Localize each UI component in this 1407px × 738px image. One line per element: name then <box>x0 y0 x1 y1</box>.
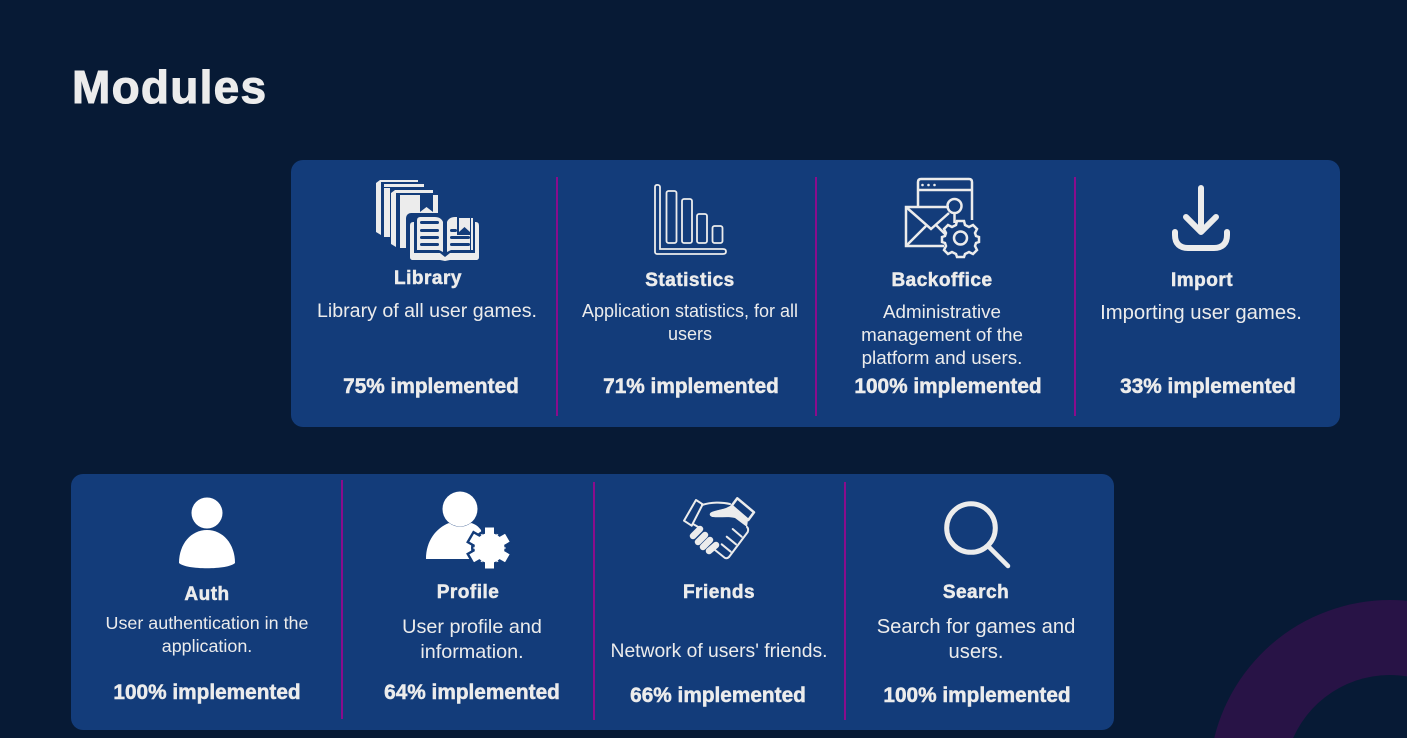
icon: backoffice <box>904 178 980 258</box>
text: import: Importing user games. <box>1100 302 1302 324</box>
heading: search: Search <box>943 582 1009 603</box>
text: friends: Network of users' friends. <box>611 641 827 662</box>
heading: profile: Profile <box>437 582 499 603</box>
heading: backoffice: Backoffice <box>891 270 993 291</box>
text: statistics: Application statistics, for all <box>582 301 798 321</box>
divider <box>593 482 595 720</box>
divider <box>556 177 558 416</box>
text: statistics <box>582 301 798 344</box>
progress: search: 100% implemented <box>883 684 1071 707</box>
icon: library <box>376 180 479 261</box>
text: auth <box>106 613 308 656</box>
heading: auth: Auth <box>184 584 230 605</box>
divider <box>1074 177 1076 416</box>
icon: statistics <box>654 184 727 255</box>
title: Modules <box>72 61 267 113</box>
icon: profile <box>426 492 510 568</box>
icon: search <box>944 501 1010 568</box>
panel: top modules <box>291 160 1340 427</box>
text: auth: User authentication in the <box>106 613 308 633</box>
text: profile <box>402 616 542 663</box>
heading: statistics: Statistics <box>645 270 735 291</box>
text: library: Library of all user games. <box>317 300 537 322</box>
text: backoffice: platform and users. <box>862 347 1022 368</box>
text: profile: information. <box>420 641 524 663</box>
text: backoffice: Administrative <box>883 301 1001 322</box>
heading: import: Import <box>1171 270 1233 291</box>
progress: friends: 66% implemented <box>630 684 806 707</box>
heading: friends: Friends <box>683 582 755 603</box>
progress: backoffice: 100% implemented <box>854 375 1042 398</box>
progress: import: 33% implemented <box>1120 375 1296 398</box>
icon: friends <box>683 497 756 560</box>
text: auth: application. <box>162 636 252 656</box>
progress: profile: 64% implemented <box>384 681 560 704</box>
progress: statistics: 71% implemented <box>603 375 779 398</box>
divider <box>815 177 817 416</box>
divider <box>844 482 846 720</box>
text: statistics: users <box>668 324 712 344</box>
progress: auth: 100% implemented <box>113 681 301 704</box>
text: profile: User profile and <box>402 616 542 638</box>
text: backoffice <box>861 301 1023 368</box>
divider <box>341 480 343 719</box>
text: backoffice: management of the <box>861 324 1023 345</box>
text: search: users. <box>948 641 1003 663</box>
text: search <box>877 616 1075 663</box>
progress: library: 75% implemented <box>343 375 519 398</box>
icon: auth <box>179 498 235 568</box>
text: search: Search for games and <box>877 616 1075 638</box>
panel: bottom modules <box>71 474 1114 730</box>
icon: import <box>1172 185 1230 251</box>
heading: library: Library <box>394 268 462 289</box>
